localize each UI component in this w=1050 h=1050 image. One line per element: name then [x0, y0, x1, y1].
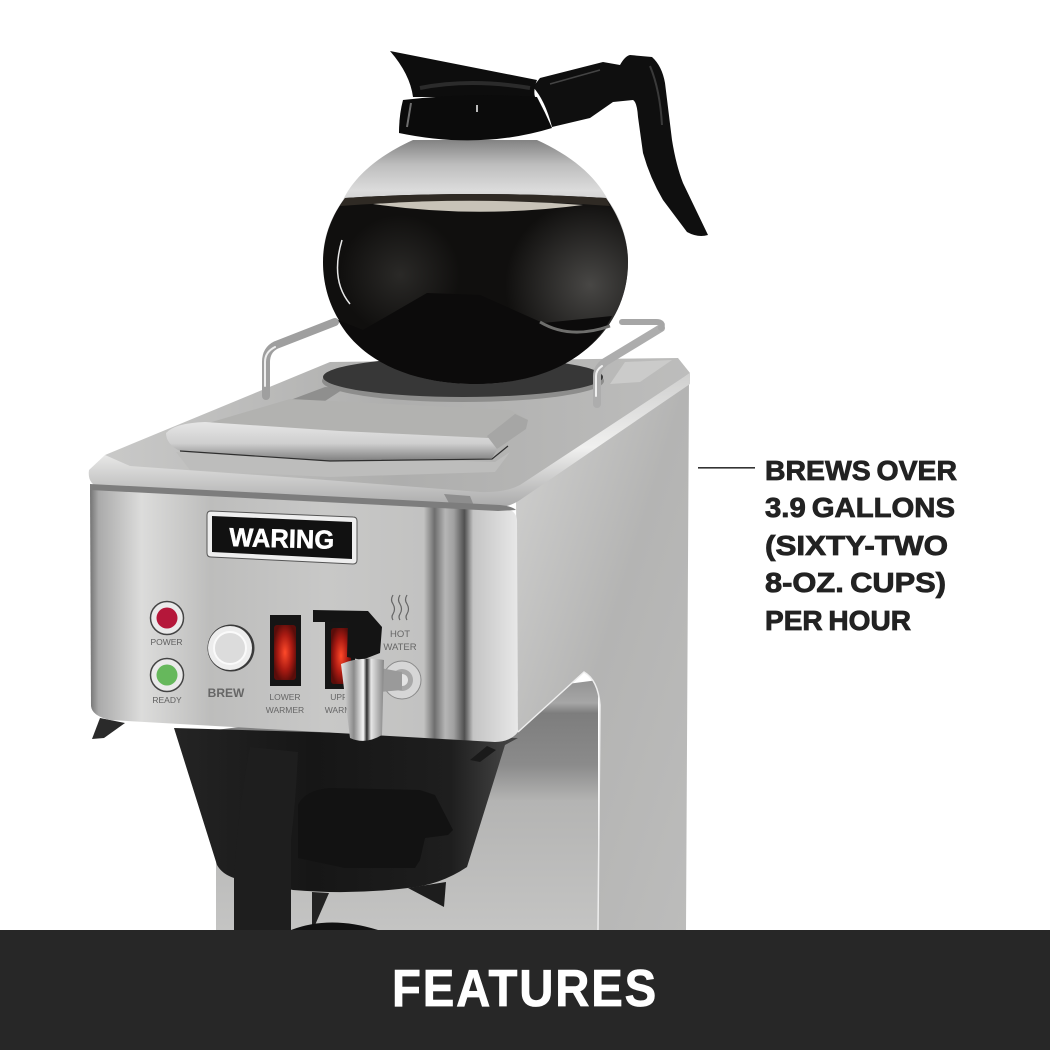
- carafe: [323, 51, 708, 384]
- callout text: 8-OZ. CUPS): [765, 567, 946, 598]
- lower warmer switch: WARMER: [266, 705, 304, 715]
- logo badge: [207, 511, 357, 564]
- warmer plate: [322, 360, 604, 402]
- brew button: BREW: [208, 686, 245, 700]
- hot water label: [383, 595, 417, 653]
- control panel: [90, 484, 518, 742]
- glass globe: [323, 140, 628, 384]
- callout text: PER HOUR: [765, 605, 911, 636]
- basket clips: [92, 718, 125, 739]
- ready light: [150, 658, 184, 705]
- banner heading: FEATURES: [392, 960, 658, 1018]
- upper warmer switch: WARM: [325, 705, 351, 715]
- lower warmer lid: [166, 399, 528, 477]
- hot water label: HOT: [390, 629, 410, 640]
- top surface: [89, 357, 690, 509]
- callout text: (SIXTY-TWO: [765, 530, 948, 561]
- callout text: 3.9 GALLONS: [765, 492, 955, 523]
- carafe below: [291, 922, 378, 930]
- lower warmer switch: [266, 615, 304, 715]
- callout text: BREWS OVER: [765, 455, 957, 486]
- power light: POWER: [150, 637, 183, 647]
- carafe handle: [533, 55, 708, 236]
- coffee: [323, 194, 628, 384]
- power light: [150, 602, 184, 647]
- carafe spout: [390, 51, 537, 97]
- carafe rail right: [596, 322, 662, 404]
- upper warmer switch: [325, 622, 355, 715]
- logo badge: WARING: [229, 522, 335, 555]
- front lip: [89, 373, 690, 509]
- rear stainless body: [216, 680, 598, 930]
- callout leader line: [698, 467, 755, 469]
- machine side panel: [516, 378, 689, 930]
- upper warmer switch: UPP: [330, 692, 348, 702]
- ready light: READY: [152, 695, 182, 705]
- lower warmer switch: LOWER: [269, 692, 301, 702]
- coffee maker machine: [89, 51, 708, 932]
- carafe rail left: [265, 322, 335, 396]
- bottom banner: [0, 930, 1050, 1050]
- recess: [298, 788, 453, 868]
- callout text: [765, 455, 957, 636]
- hot water label: WATER: [383, 642, 417, 653]
- brew basket handle: [234, 747, 298, 930]
- carafe collar: [399, 95, 552, 140]
- basket feet: [408, 882, 446, 907]
- filter basket: [174, 728, 518, 932]
- brew button: [208, 624, 254, 700]
- hot water faucet: [313, 610, 421, 741]
